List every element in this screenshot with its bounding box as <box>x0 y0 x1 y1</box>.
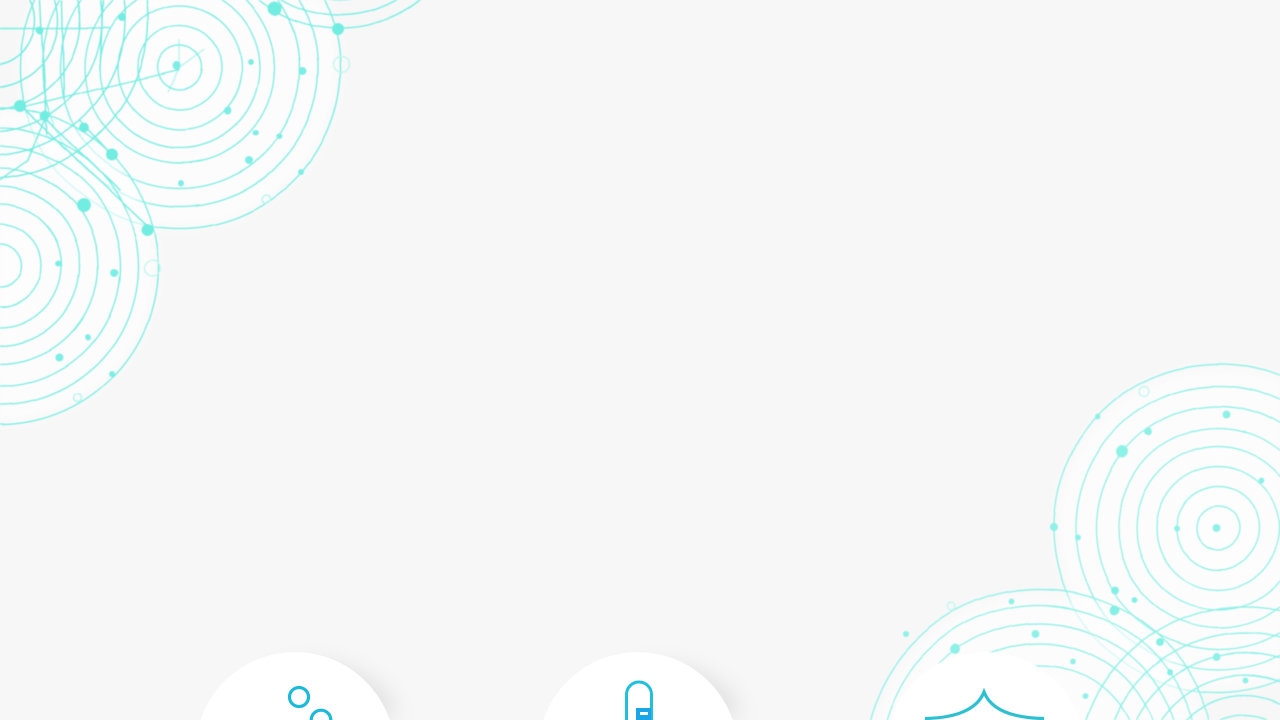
icon: crown <box>925 692 1044 718</box>
ring cluster: top left <box>0 0 468 431</box>
icon: bubbles <box>290 688 331 720</box>
ring: far-left partial spiral <box>0 0 150 228</box>
ring: main top-left spiral <box>12 0 349 236</box>
badge shadow <box>570 663 738 720</box>
badge: crown <box>890 652 1080 720</box>
ring: bottom centre-right spiral <box>860 585 1220 720</box>
badge disc <box>200 652 390 720</box>
icon: capsule <box>626 682 652 720</box>
node dots: top-left junctions <box>14 1 343 235</box>
ring: upper right spiral <box>1048 358 1280 698</box>
ring: bottom right spiral <box>1077 607 1280 720</box>
badge disc <box>890 652 1080 720</box>
ring cluster: bottom right <box>860 358 1280 720</box>
badge: capsule <box>543 652 738 720</box>
ring: lower-left spiral <box>0 101 165 431</box>
node dots: bottom-right junctions <box>1110 586 1173 675</box>
badge: bubbles <box>200 652 394 720</box>
badge shadow <box>224 661 394 720</box>
ring: top partial spiral <box>212 0 468 28</box>
badge disc <box>543 652 733 720</box>
